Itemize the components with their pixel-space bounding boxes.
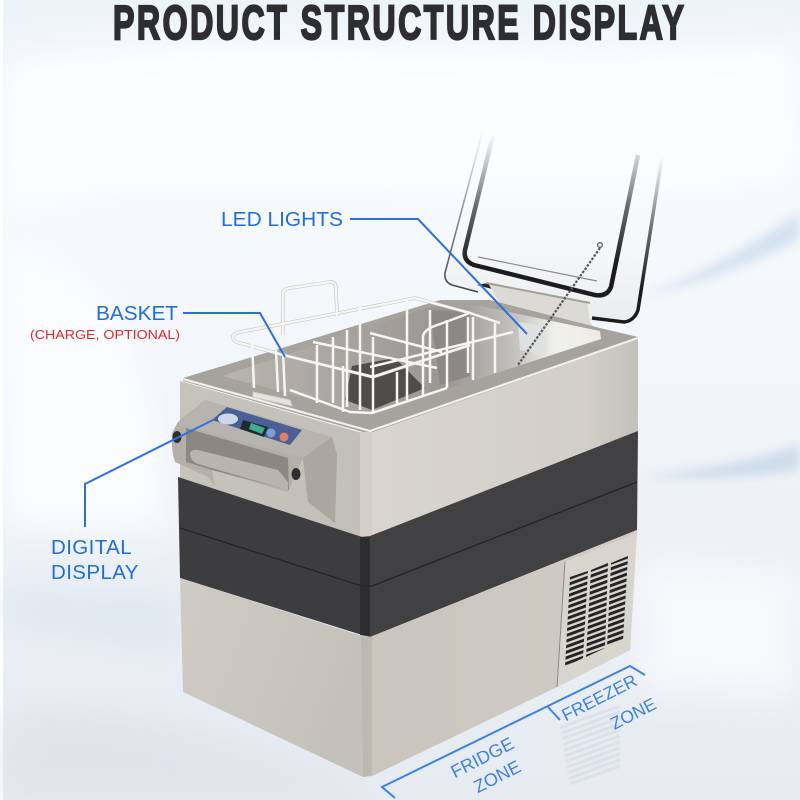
digital panel: [212, 407, 302, 445]
label: LED lights: LED LIGHTS: [221, 209, 343, 231]
label: charge optional: (CHARGE, OPTIONAL): [30, 328, 180, 342]
label: freezer zone: FREEZER: [558, 670, 640, 725]
label: digital display: DISPLAY: [51, 561, 139, 584]
vent floor reflection: [560, 705, 620, 785]
label: digital display: DIGITAL: [51, 536, 132, 559]
callout line: LED lights: [350, 219, 527, 334]
open lid: [445, 130, 662, 338]
dark band right: [370, 431, 638, 637]
dark band corner: [360, 536, 372, 637]
label: freezer zone: ZONE: [607, 694, 659, 734]
callout line: digital display: [85, 420, 213, 527]
lid strap: [518, 243, 602, 365]
basket tab: [253, 392, 292, 406]
led light: [518, 322, 547, 355]
freezer tick: [548, 707, 560, 720]
lower right face: [362, 530, 637, 777]
lid hinge: [488, 283, 601, 338]
lower left face: [180, 578, 363, 777]
label: fridge zone: FRIDGE: [447, 733, 517, 782]
right upper face: [370, 339, 638, 537]
dark band left: [178, 477, 362, 635]
label: fridge zone: ZONE: [470, 756, 524, 797]
fridge body: [178, 300, 638, 777]
body top rim: [183, 300, 638, 434]
basket wire shadow: [233, 282, 470, 377]
vents: [565, 556, 628, 667]
wire basket: [233, 282, 513, 413]
zone bracket: [382, 666, 645, 798]
callout line: basket: [183, 313, 285, 357]
label: basket: BASKET: [96, 303, 178, 325]
basket wires: [233, 282, 513, 413]
control module and handle: [172, 400, 337, 523]
label: fridge zone: [447, 733, 524, 797]
corner highlight: [360, 432, 372, 540]
left upper face: [180, 381, 362, 538]
